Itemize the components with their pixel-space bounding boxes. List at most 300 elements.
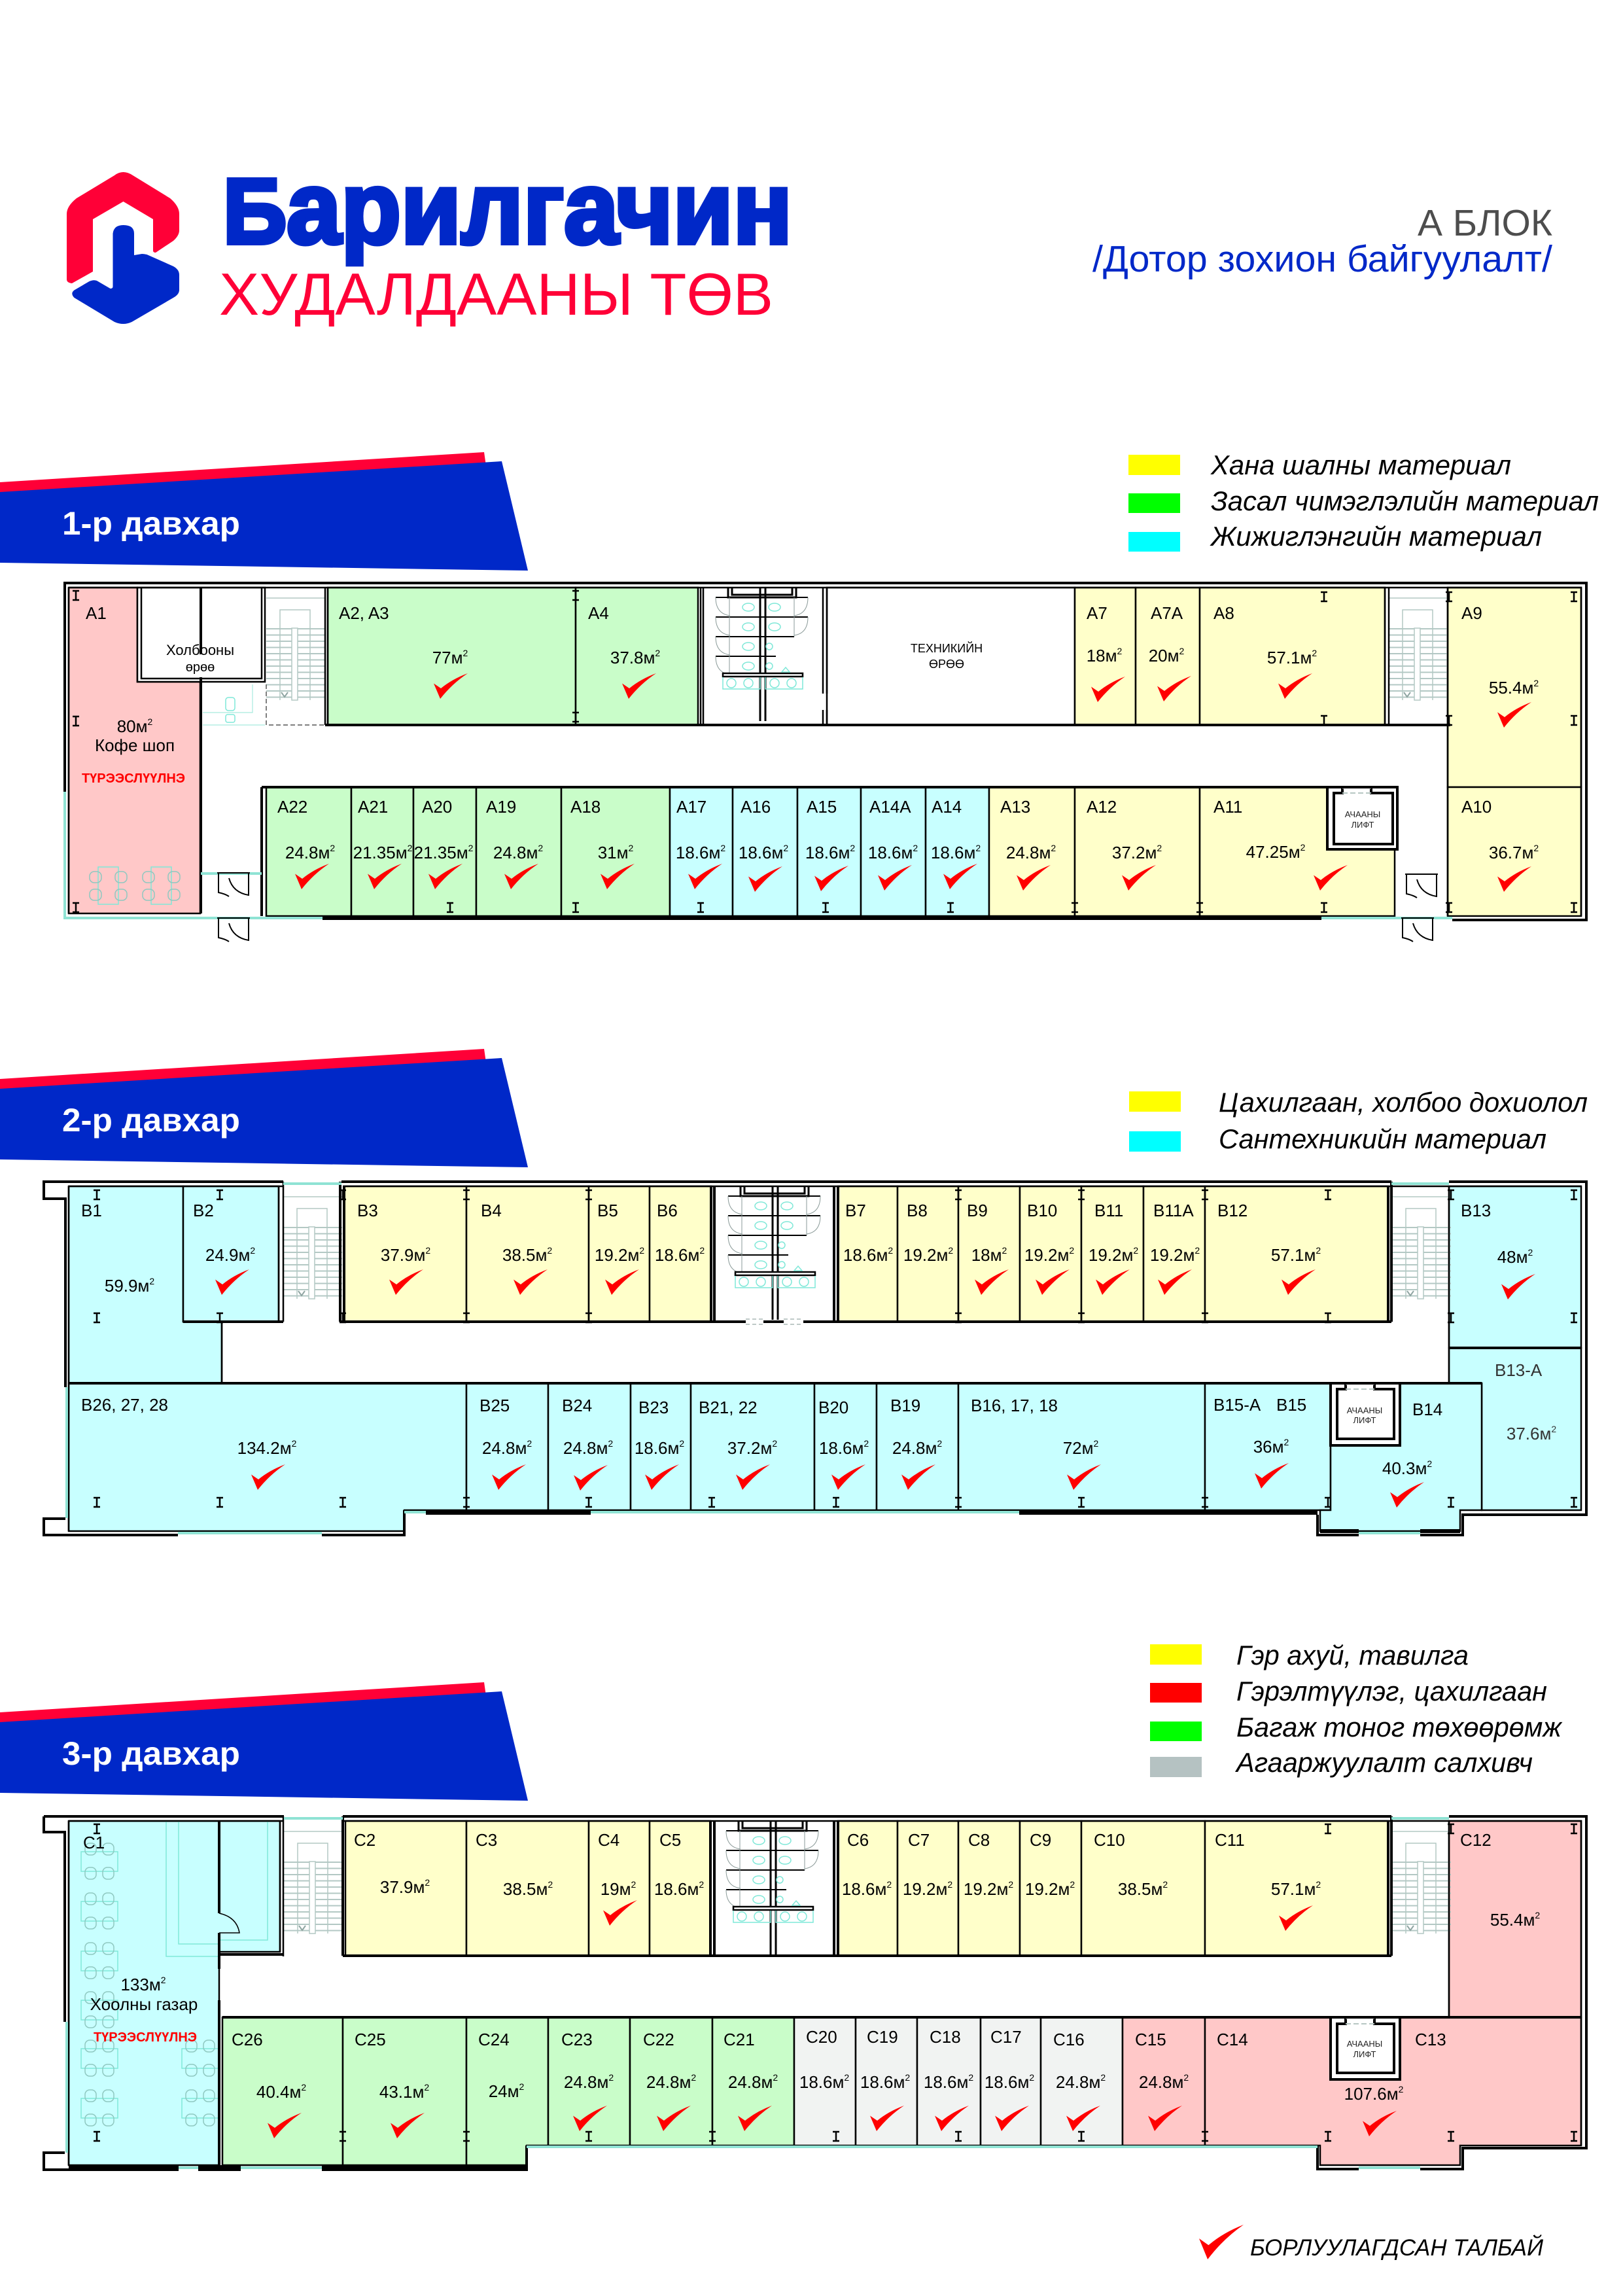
room B4: 2 xyxy=(547,1245,552,1256)
room A21 xyxy=(351,787,413,916)
room C21: 2 xyxy=(773,2072,778,2083)
room B7 xyxy=(838,1186,898,1322)
room B1: B1 xyxy=(81,1201,102,1220)
room B13: B13 xyxy=(1461,1201,1491,1220)
room C7: C7 xyxy=(908,1830,930,1850)
room A22: 2 xyxy=(330,843,335,853)
room B19: 24.8м xyxy=(892,1438,937,1458)
room B11A xyxy=(1143,1186,1205,1322)
floor plan 2 xyxy=(44,1182,1586,1535)
toilets xyxy=(716,588,808,721)
room A20 xyxy=(413,787,476,916)
floor 2 legend: Сантехникийн материал xyxy=(1219,1123,1546,1154)
room A15: 18.6м xyxy=(805,843,850,862)
room B26, 27, 28: B26, 27, 28 xyxy=(81,1395,168,1415)
room A7A: 20м xyxy=(1149,646,1179,665)
room A2, A3 xyxy=(328,588,576,725)
room C17: C17 xyxy=(990,2027,1022,2047)
room C15 xyxy=(1123,2017,1205,2146)
room B16, 17, 18: B16, 17, 18 xyxy=(971,1396,1058,1415)
room B13-A: 37.6м xyxy=(1507,1424,1551,1443)
room C15: 24.8м xyxy=(1139,2072,1183,2092)
floor 2 banner: 2-р давхар xyxy=(62,1102,240,1139)
room C12: C12 xyxy=(1460,1830,1492,1850)
room A1 coffee shop xyxy=(69,588,200,913)
column markers xyxy=(94,1824,1577,2141)
room C10 xyxy=(1081,1821,1205,1956)
room C26: C26 xyxy=(232,2030,263,2049)
room C7: 19.2м xyxy=(903,1879,947,1899)
room C20: 18.6м xyxy=(799,2072,844,2092)
room C3: 2 xyxy=(548,1879,553,1890)
room A15 xyxy=(797,787,861,916)
room B15-A, B15: B15-A xyxy=(1213,1395,1261,1415)
room A7: 2 xyxy=(1117,646,1123,656)
room B26, 27, 28: 2 xyxy=(292,1438,297,1449)
room C8 xyxy=(958,1821,1020,1956)
room A10: 2 xyxy=(1533,843,1539,853)
room B15-A, B15 xyxy=(1205,1383,1331,1510)
room C14, C13: 2 xyxy=(1399,2084,1404,2094)
room C9: 2 xyxy=(1070,1879,1075,1890)
room A9: 2 xyxy=(1533,678,1539,688)
room B13-A: 2 xyxy=(1551,1424,1556,1434)
room B1: 2 xyxy=(149,1276,154,1286)
room C15: C15 xyxy=(1135,2030,1166,2049)
room B21, 22: 37.2м xyxy=(727,1438,772,1458)
sold area legend xyxy=(1199,2225,1544,2261)
staircase right xyxy=(1392,1831,1451,1934)
communication room: өрөө xyxy=(186,660,215,675)
room B9: B9 xyxy=(967,1201,988,1220)
toilets xyxy=(728,1186,820,1320)
room B7: B7 xyxy=(845,1201,866,1220)
room A2, A3: 77м xyxy=(432,648,463,667)
room A17: 2 xyxy=(720,843,725,853)
room B1: 59.9м xyxy=(105,1276,149,1296)
room C10: 2 xyxy=(1162,1879,1168,1890)
floor 2 banner xyxy=(0,1049,528,1167)
room C26: 2 xyxy=(301,2082,306,2093)
room C19: C19 xyxy=(867,2027,898,2047)
room C12 xyxy=(1449,1821,1581,2017)
room C4: C4 xyxy=(598,1830,620,1850)
room A15: 2 xyxy=(850,843,855,853)
room C10: C10 xyxy=(1094,1830,1125,1850)
room C14, C13: 107.6м xyxy=(1344,2084,1399,2104)
room B21, 22: B21, 22 xyxy=(699,1398,758,1417)
room A8 xyxy=(1200,588,1385,725)
room A11 xyxy=(1200,787,1395,916)
floor plan 1 xyxy=(65,583,1586,942)
room C22: 24.8м xyxy=(646,2072,691,2092)
room C24: C24 xyxy=(478,2030,510,2049)
freight lift xyxy=(1327,787,1397,849)
room A18: 31м xyxy=(598,843,628,862)
floor 1 legend: Жижиглэнгийн материал xyxy=(1210,521,1542,552)
room A2, A3: 2 xyxy=(463,648,468,658)
room C21: C21 xyxy=(724,2030,755,2049)
room B4 xyxy=(466,1186,589,1322)
room A12: 2 xyxy=(1157,843,1162,853)
room B2 xyxy=(183,1186,279,1322)
room C6: 2 xyxy=(886,1879,892,1890)
room A14A: 2 xyxy=(913,843,918,853)
column markers xyxy=(73,591,1577,912)
room B12: B12 xyxy=(1217,1201,1248,1220)
room C2: 2 xyxy=(425,1877,430,1888)
room C25 xyxy=(343,2017,466,2165)
room B2: B2 xyxy=(193,1201,214,1220)
room C22 xyxy=(630,2017,712,2146)
room B13-A: B13-A xyxy=(1495,1360,1543,1380)
room A7A: A7A xyxy=(1151,603,1183,623)
room C20: C20 xyxy=(806,2027,837,2047)
room A17 xyxy=(670,787,733,916)
room A8: 2 xyxy=(1312,648,1317,658)
room A14 xyxy=(926,787,989,916)
room C1 canteen: Хоолны газар xyxy=(90,1994,198,2014)
freight lift xyxy=(1331,1383,1400,1445)
room B21, 22 xyxy=(691,1383,814,1510)
room A18: A18 xyxy=(570,797,601,817)
building walls xyxy=(44,1182,1586,1535)
room C11: 57.1м xyxy=(1271,1879,1316,1899)
room C2 xyxy=(345,1821,466,1956)
staircase right xyxy=(1392,1197,1451,1299)
room A21: 2 xyxy=(408,843,413,853)
room A14A xyxy=(861,787,926,916)
room C3 xyxy=(466,1821,589,1956)
floor 3 legend: Агааржуулалт салхивч xyxy=(1234,1747,1533,1778)
room A9: 55.4м xyxy=(1489,678,1533,698)
room B7: 2 xyxy=(888,1245,893,1256)
room C1 canteen: 133м xyxy=(120,1975,161,1994)
room A11: A11 xyxy=(1213,797,1242,817)
room C4: 2 xyxy=(631,1879,636,1890)
room B23: 18.6м xyxy=(635,1438,679,1458)
room C18: 2 xyxy=(968,2072,973,2083)
room B11: B11 xyxy=(1094,1201,1123,1220)
room C17 xyxy=(981,2017,1041,2146)
freight lift: АЧААНЫ xyxy=(1345,809,1380,819)
room C1 canteen xyxy=(69,1821,280,2165)
room A4 xyxy=(576,588,698,725)
room A20: A20 xyxy=(422,797,452,817)
room A17: 18.6м xyxy=(676,843,720,862)
room B11: 19.2м xyxy=(1089,1245,1133,1265)
staircase left xyxy=(266,598,325,700)
floor plan 3 xyxy=(44,1816,1586,2170)
room C14, C13: C13 xyxy=(1415,2030,1446,2049)
room A4: 37.8м xyxy=(610,648,655,667)
room C6: 18.6м xyxy=(842,1879,886,1899)
room B8: B8 xyxy=(907,1201,928,1220)
staircase right xyxy=(1389,598,1448,700)
room B5: 19.2м xyxy=(595,1245,639,1265)
floor 1 legend: Засал чимэглэлийн материал xyxy=(1211,486,1599,516)
room A13: A13 xyxy=(1000,797,1030,817)
room B3: 2 xyxy=(425,1245,430,1256)
room C21 xyxy=(712,2017,794,2146)
room A10: A10 xyxy=(1461,797,1492,817)
floor 3 legend xyxy=(1150,1640,1563,1778)
room A14A: A14A xyxy=(869,797,911,817)
room C8: 19.2м xyxy=(964,1879,1008,1899)
technical room: ӨРӨӨ xyxy=(929,658,964,671)
logo mark xyxy=(67,172,179,324)
room C12: 55.4м xyxy=(1490,1910,1535,1930)
room A10 xyxy=(1448,787,1581,916)
room A13 xyxy=(989,787,1075,916)
freight lift: ЛИФТ xyxy=(1353,2049,1376,2059)
room C18: 18.6м xyxy=(924,2072,968,2092)
communication room xyxy=(137,588,265,913)
room A14: A14 xyxy=(932,797,962,817)
room A18: 2 xyxy=(628,843,633,853)
room B25: 2 xyxy=(527,1438,532,1449)
room B13: 2 xyxy=(1528,1247,1533,1258)
room A20: 2 xyxy=(468,843,474,853)
room B13: 48м xyxy=(1497,1247,1528,1267)
room B24 xyxy=(548,1383,631,1510)
logo wordmark: Барилгачин xyxy=(223,152,792,266)
room B15-A, B15: 2 xyxy=(1283,1437,1289,1447)
floor 1 banner xyxy=(0,452,528,571)
room A16 xyxy=(733,787,797,916)
communication room: Холбооны xyxy=(166,642,234,658)
room C5 xyxy=(650,1821,710,1956)
room B11A: 2 xyxy=(1195,1245,1200,1256)
room A9 xyxy=(1448,588,1581,787)
room B11 xyxy=(1081,1186,1143,1322)
room A1 coffee shop: 2 xyxy=(148,716,153,727)
freight lift: ЛИФТ xyxy=(1353,1415,1376,1425)
room C19: 2 xyxy=(905,2072,910,2083)
block subtitle: /Дотор зохион байгуулалт/ xyxy=(1092,238,1552,280)
room B9: 18м xyxy=(971,1245,1002,1265)
room A10: 36.7м xyxy=(1489,843,1533,862)
room C14, C13 xyxy=(1205,2017,1581,2165)
room B20 xyxy=(814,1383,877,1510)
room C5: 2 xyxy=(699,1879,704,1890)
room A1 coffee shop: 80м xyxy=(117,716,148,736)
room A12: A12 xyxy=(1087,797,1117,817)
floor 3 banner xyxy=(0,1682,528,1801)
room C26 xyxy=(222,2017,343,2165)
room A12 xyxy=(1075,787,1200,916)
room C3: 38.5м xyxy=(503,1879,548,1899)
block title: А БЛОК xyxy=(1418,202,1552,244)
room B19: B19 xyxy=(890,1396,920,1415)
room B19: 2 xyxy=(937,1438,942,1449)
room A13: 2 xyxy=(1051,843,1056,853)
room C9: 19.2м xyxy=(1025,1879,1070,1899)
floor 2 legend xyxy=(1129,1087,1588,1154)
room B8 xyxy=(898,1186,958,1322)
room B20: B20 xyxy=(818,1398,848,1417)
room C11 xyxy=(1205,1821,1388,1956)
room C6: C6 xyxy=(847,1830,869,1850)
room B25 xyxy=(466,1383,548,1510)
room B13-A xyxy=(1449,1348,1581,1510)
room B19 xyxy=(877,1383,958,1510)
room A2, A3: A2, A3 xyxy=(339,603,389,623)
room A14: 18.6м xyxy=(931,843,975,862)
room A16: 2 xyxy=(783,843,788,853)
room A11: 2 xyxy=(1300,842,1306,853)
room C26: 40.4м xyxy=(256,2082,301,2102)
room C19: 18.6м xyxy=(860,2072,905,2092)
room A19: 24.8м xyxy=(493,843,538,862)
room A14A: 18.6м xyxy=(868,843,913,862)
room B26, 27, 28: 134.2м xyxy=(237,1438,292,1458)
room C11: 2 xyxy=(1316,1879,1321,1890)
room C11: C11 xyxy=(1215,1830,1245,1850)
technical room xyxy=(827,588,1075,725)
floor 1 banner: 1-р давхар xyxy=(62,505,240,542)
room C22: C22 xyxy=(643,2030,674,2049)
room C8: 2 xyxy=(1008,1879,1013,1890)
room C17: 2 xyxy=(1029,2072,1034,2083)
room A16: 18.6м xyxy=(739,843,783,862)
room B11A: 19.2м xyxy=(1150,1245,1195,1265)
room C8: C8 xyxy=(968,1830,990,1850)
room B10 xyxy=(1020,1186,1081,1322)
room C1 canteen: C1 xyxy=(83,1833,105,1852)
room C4: 19м xyxy=(601,1879,631,1899)
room B3 xyxy=(344,1186,466,1322)
room C23: C23 xyxy=(561,2030,593,2049)
room B5: 2 xyxy=(639,1245,644,1256)
floor 3 legend: Гэрэлтүүлэг, цахилгаан xyxy=(1236,1676,1547,1706)
room C1 canteen: 2 xyxy=(161,1975,166,1985)
room B25: B25 xyxy=(480,1396,510,1415)
room A19: A19 xyxy=(486,797,516,817)
room B16, 17, 18: 72м xyxy=(1063,1438,1094,1458)
room B10: 2 xyxy=(1069,1245,1074,1256)
room B6: 18.6м xyxy=(655,1245,699,1265)
room B23: B23 xyxy=(638,1398,669,1417)
room C18 xyxy=(917,2017,981,2146)
room B8: 2 xyxy=(948,1245,953,1256)
room C12: 2 xyxy=(1535,1910,1540,1920)
room C23 xyxy=(548,2017,630,2146)
room B12: 57.1м xyxy=(1271,1245,1316,1265)
room B5 xyxy=(589,1186,650,1322)
floor 3 legend: Багаж тоног төхөөрөмж xyxy=(1236,1712,1563,1742)
room C23: 2 xyxy=(608,2072,614,2083)
building walls xyxy=(44,1816,1586,2170)
room B10: 19.2м xyxy=(1024,1245,1069,1265)
room A13: 24.8м xyxy=(1006,843,1051,862)
room A8: A8 xyxy=(1213,603,1234,623)
room C14, C13: C14 xyxy=(1217,2030,1248,2049)
room A1 coffee shop: ТҮРЭЭСЛҮҮЛНЭ xyxy=(82,771,185,786)
building walls xyxy=(65,583,1586,920)
room B4: 38.5м xyxy=(502,1245,547,1265)
room B20: 2 xyxy=(864,1438,869,1449)
room C21: 24.8м xyxy=(728,2072,773,2092)
room B11: 2 xyxy=(1133,1245,1138,1256)
room B4: B4 xyxy=(481,1201,502,1220)
room B9 xyxy=(958,1186,1020,1322)
room B6: 2 xyxy=(699,1245,705,1256)
room A21: 21.35м xyxy=(353,843,408,862)
room A22 xyxy=(266,787,351,916)
room B13 xyxy=(1449,1186,1581,1348)
room A4: 2 xyxy=(655,648,660,658)
room C24: 24м xyxy=(489,2081,519,2101)
room A7A: 2 xyxy=(1179,646,1184,656)
room C25: 43.1м xyxy=(379,2082,424,2102)
room B6 xyxy=(650,1186,711,1322)
room C2: C2 xyxy=(354,1830,375,1850)
room B2: 2 xyxy=(250,1245,255,1256)
room A18 xyxy=(561,787,670,916)
room B21, 22: 2 xyxy=(772,1438,777,1449)
freight lift: АЧААНЫ xyxy=(1347,1405,1382,1415)
room B23 xyxy=(631,1383,691,1510)
freight lift: АЧААНЫ xyxy=(1347,2039,1382,2049)
room B26, 27, 28 xyxy=(69,1383,466,1531)
room A22: 24.8м xyxy=(285,843,330,862)
floor 3 legend: Гэр ахуй, тавилга xyxy=(1236,1640,1469,1670)
room A1 coffee shop: Кофе шоп xyxy=(95,735,175,755)
room C20: 2 xyxy=(844,2072,849,2083)
room A15: A15 xyxy=(807,797,837,817)
room B16, 17, 18 xyxy=(958,1383,1205,1510)
room B24: 24.8м xyxy=(563,1438,608,1458)
room C24 xyxy=(466,2017,548,2165)
room C4 xyxy=(589,1821,650,1956)
room B10: B10 xyxy=(1027,1201,1057,1220)
room B16, 17, 18: 2 xyxy=(1094,1438,1099,1449)
room C9 xyxy=(1020,1821,1081,1956)
room A7 xyxy=(1075,588,1136,725)
room A20: 21.35м xyxy=(414,843,468,862)
room C1 canteen: ТҮРЭЭСЛҮҮЛНЭ xyxy=(94,2030,197,2045)
floor 1 legend xyxy=(1128,450,1599,552)
room B2: 24.9м xyxy=(205,1245,250,1265)
room A21: A21 xyxy=(358,797,388,817)
room C16: 24.8м xyxy=(1056,2072,1100,2092)
room A17: A17 xyxy=(676,797,707,817)
technical room: ТЕХНИКИЙН xyxy=(911,641,983,655)
room C7 xyxy=(898,1821,958,1956)
room B5: B5 xyxy=(597,1201,618,1220)
room A22: A22 xyxy=(277,797,307,817)
room B14: 40.3м xyxy=(1382,1458,1427,1478)
room C5: 18.6м xyxy=(654,1879,699,1899)
room A11: 47.25м xyxy=(1246,842,1300,862)
room C3: C3 xyxy=(476,1830,497,1850)
room B9: 2 xyxy=(1002,1245,1007,1256)
room C16: C16 xyxy=(1053,2030,1085,2049)
room A4: A4 xyxy=(588,603,609,623)
room C17: 18.6м xyxy=(985,2072,1029,2092)
room B3: B3 xyxy=(357,1201,378,1220)
freight lift: ЛИФТ xyxy=(1352,820,1374,830)
room B15-A, B15: B15 xyxy=(1276,1395,1306,1415)
room A7A xyxy=(1136,588,1200,725)
room C9: C9 xyxy=(1030,1830,1051,1850)
room A9: A9 xyxy=(1461,603,1482,623)
room C24: 2 xyxy=(519,2081,525,2092)
room B3: 37.9м xyxy=(381,1245,425,1265)
room A12: 37.2м xyxy=(1112,843,1157,862)
room A19 xyxy=(476,787,561,916)
